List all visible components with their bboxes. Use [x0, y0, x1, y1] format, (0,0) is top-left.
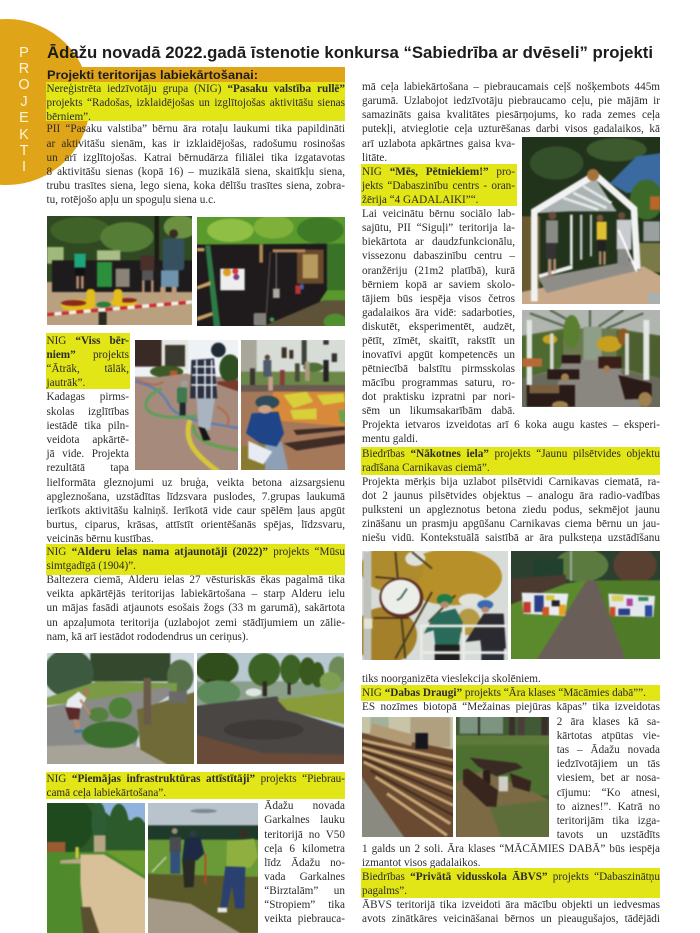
photo: three people mowing along road — [148, 803, 258, 933]
text block: right column top — [362, 81, 660, 135]
section heading: Projekti teritorijas labiekārtošanai: — [47, 68, 258, 82]
text block: Mēs, Pētniekiem narrow: gadalaikos āra vidē: sadarboties, — [362, 307, 515, 319]
text block: Ādažu novada Garkalnes: teritorijā no V50 — [264, 829, 345, 841]
text block: Ādažu novada Garkalnes: “Stropiem” tika — [264, 899, 345, 911]
decorative orange circle — [0, 19, 90, 185]
side label: PROJEKTI: P — [19, 44, 29, 60]
text block: Alderu ielas: Baltezera ciemā, Alderu ielas 27 vēsturiskās ēkas pagalmā tika — [46, 574, 345, 586]
text block: Pasaku valstība: PII “Pasaku valstiba” bērnu āra rotaļu laukumi tika papildināti — [46, 123, 345, 135]
text block: Dabas Draugi wrapped text: tas – Ādažu novada — [557, 744, 660, 756]
photo: picnic table in the forest — [456, 717, 549, 837]
text block: Viss bērniem narrow — [46, 335, 129, 474]
text block: Dabas Draugi: NIG “Dabas Draugi” projekts “Āra klases “Mācāmies dabā””. — [362, 687, 646, 699]
text block: Privātā vidusskola ĀBVS: pagalms”. — [362, 885, 407, 897]
photo: gravel road with truck — [47, 803, 145, 933]
highlight: Dabas Draugi — [361, 685, 660, 701]
text block: Mēs, Pētniekiem narrow: pētīt, zīmēt, skaitīt, rakstīt un — [362, 335, 515, 347]
text block: Nākotnes iela: zināšanu un prasmju apgūšanu Carnikavas ciema bērnu un jau- — [362, 518, 660, 530]
text block: Pasaku valstība — [46, 83, 345, 206]
highlight: Mēs, Pētniekiem — [361, 164, 517, 206]
text block: Mēs, Pētniekiem narrow: bērniem kopā ar saviem skolo- — [362, 279, 515, 291]
highlight: Viss bērniem — [46, 333, 130, 389]
text block: Mēs, Pētniekiem narrow: žērija “4 GADALAIKI”“. — [362, 194, 478, 206]
text block: Ādažu novada Garkalnes: Ādažu novada — [264, 800, 345, 812]
text block: Dabas Draugi wrapped text: tavots un uzstādīts — [557, 829, 660, 841]
text block: Nākotnes iela: niešu vidū. Kontekstuālā saistībā ar āra pulksteņa uzstādīšanu — [362, 532, 660, 544]
text block: Piemājas infrastruktūras: NIG “Piemājas infrastruktūras attīstītāji” projekts “Piebrau- — [46, 773, 345, 785]
text block: Mēs, Pētniekiem narrow: mācību programmas saturu, ro- — [362, 377, 515, 389]
text block: Dabas Draugi wrapped text: kārtotas atpūtas vie- — [557, 730, 660, 742]
photo: greenhouse frame with three people — [522, 137, 660, 304]
text block: Mēs, Pētniekiem narrow: inovatīvi apgūt kompetencēs un — [362, 349, 515, 361]
text block: Ādažu novada Garkalnes: vada Garkalnes — [264, 871, 345, 883]
text block: Projekta ietvaros: Projekta ietvaros izveidotas arī 6 koka augu kastes – eksperi- — [362, 419, 660, 431]
text block: Pasaku valstība: bērniem”. — [46, 111, 91, 123]
highlight: Piemājas infrastruktūras attīstītāji — [46, 772, 345, 799]
text block: Piemājas infrastruktūras — [46, 773, 345, 799]
side label: PROJEKTI: O — [18, 77, 30, 93]
text block: right column top: samazināts gaisa kvalitātes piesārņojums, ko rada zemes ceļa — [362, 109, 660, 121]
text block: Dabas Draugi wrapped text — [556, 716, 660, 841]
text block: Alderu ielas: simtgadīgā (1904)”. — [46, 560, 136, 572]
text block: Pasaku valstība: un arī izglītojošas. Katrai bērnudārza filiālei tika izgatavotas — [46, 152, 345, 164]
text block: Pasaku valstība: Nereģistrēta iedzīvotāju grupa (NIG) “Pasaku valstība rullē” — [46, 83, 345, 95]
text block: Dabas Draugi — [362, 687, 660, 713]
text block: Viss bērniem continued: lielformāta gleznojumi uz bruģa, veikta betona aizsargsienu — [46, 477, 345, 489]
orange heading band — [46, 67, 345, 82]
text block: Dabas Draugi: ES nozīmes biotopā “Mežainas piejūras kāpas” tika izveidotas — [362, 701, 660, 713]
side label: PROJEKTI: J — [20, 94, 28, 110]
photo: child and woman on painted paving — [135, 340, 238, 470]
highlight: Pasaku valstība rullē — [46, 82, 345, 121]
text block: Dabas Draugi wrapped text: 2 āra klases kā sa- — [557, 716, 660, 728]
text block: Privātā vidusskola ĀBVS: avots zinātkāres veicināšanai bērnos un pieaugušajos, tādējādi — [362, 913, 660, 925]
text block: Privātā vidusskola ĀBVS: ĀBVS teritorijā tika izveidoti āra mācību objekti un iedvesmas — [362, 899, 660, 911]
highlight: Alderu ielas nama atjaunotāji — [46, 544, 345, 574]
text block: Alderu ielas — [46, 546, 345, 643]
text block: Dabas Draugi wrapped text: viesiem, bet ar nosa- — [557, 772, 660, 784]
text block: Viss bērniem narrow: Kadagas pirms- — [46, 391, 129, 403]
text block: Mēs, Pētniekiem narrow — [362, 138, 516, 417]
text block: Viss bērniem continued — [46, 477, 345, 545]
text block: Mēs, Pētniekiem narrow: sēm un likumsakarībām dabā. — [362, 405, 515, 417]
text block: Mēs, Pētniekiem narrow: jekts “Dabaszinību centrs - oran- — [362, 180, 515, 192]
text block: Ādažu novada Garkalnes: Garkalnes lauku — [264, 814, 345, 826]
side label: PROJEKTI: K — [19, 127, 29, 143]
text block: Mēs, Pētniekiem narrow: diskutēt, eksperimentēt, audzēt, — [362, 321, 515, 333]
text block: Alderu ielas: NIG “Alderu ielas nama atjaunotāji (2022)” projekts “Mūsu — [46, 546, 345, 558]
text block: Viss bērniem continued: ierīkots aktivitāšu kalniņš. Ierīkotā vide caur spēlēm ļaus apgūt — [46, 505, 345, 517]
text block: Mēs, Pētniekiem narrow: litāte. — [362, 152, 387, 164]
text block: Viss bērniem narrow: jā vide. Projekta — [46, 448, 129, 460]
photo: greenhouse interior — [522, 310, 660, 407]
text block: Mēs, Pētniekiem narrow: tājiem būs iespēja visos četros — [362, 293, 515, 305]
side label: PROJEKTI: T — [20, 143, 28, 159]
photo: boy on coloured paving — [241, 340, 345, 470]
text block: Āra klases: izmantot visos gadalaikos. — [362, 857, 480, 869]
text block: Mēs, Pētniekiem narrow: arī uzlabota apkārtnes gaisa kva- — [362, 138, 515, 150]
text block: Alderu ielas: un mājas fasādi atjaunots esošais žogs (33 m garumā), sakārtota — [46, 602, 345, 614]
text block: Pasaku valstība: trubu trasītes siena, lego siena, koka dēlīšu trasītes siena, zobra- — [46, 180, 345, 192]
text block: Viss bērniem continued: burtus, ciparus, krāsas, attīstīt orientēšanās spējas, līdzsvaru, — [46, 519, 345, 531]
text block: Viss bērniem continued: veicinās bērnu kustības. — [46, 533, 154, 545]
title: Ādažu novadā 2022.gadā īstenotie konkursa “Sabiedrība ar dvēseli” projekti — [47, 43, 653, 62]
text block: Pasaku valstība: ar aktivitāšu sienām, kas ir izklaidējošas, radošumu rosinošas — [46, 138, 345, 150]
text block: Nākotnes iela: dot 2 jaunus pilsētvides objektus – analogu āra radio-vadības — [362, 490, 660, 502]
text block: Viss bērniem narrow: niem” projekts — [46, 349, 129, 361]
photo: painted flower pots beside path — [511, 551, 660, 659]
text block: Āra klases: 1 galds un 2 soli. Āra klases “MĀCĀMIES DABĀ” būs iespēja — [362, 843, 660, 855]
text block: Mēs, Pētniekiem narrow: pētniecībā balstītu pirmsskolas — [362, 363, 515, 375]
highlight: Privātā vidusskola ĀBVS — [361, 868, 660, 898]
side label: PROJEKTI: I — [22, 159, 26, 175]
text block: Pasaku valstība: 8 aktivitāšu sienas (kopā 16) – muzikālā siena, skaitīkļu siena, — [46, 166, 345, 178]
text block: Pasaku valstība: projekts “Radošas, izklaidējošas un izglītojošas aktivitāšu sienas — [46, 97, 345, 109]
photo: activity wall with hanging objects — [197, 217, 345, 326]
text block: Projekta ietvaros — [362, 419, 660, 445]
text block: Nākotnes iela: Biedrības “Nākotnes iela” projekts “Jaunu pilsētvides objektu — [362, 448, 660, 460]
text block: Nākotnes iela — [362, 448, 660, 544]
text block: Ādažu novada Garkalnes: līdz Ādažu no- — [264, 857, 345, 869]
text block: right column top: garumā. Uzlabojot iedzīvotāju piebraucamo ceļu, pie mājām ir — [362, 95, 660, 107]
text block: Nākotnes iela: pulksteni un apgleznotus betona ziedu podus, sekmējot jaunu — [362, 504, 660, 516]
side label: PROJEKTI: R — [19, 61, 29, 77]
text block: Mēs, Pētniekiem narrow: sajūtu, PII “Siguļi” teritorija la- — [362, 222, 515, 234]
text block: Nākotnes iela: radīšana Carnikavas ciemā”. — [362, 462, 490, 474]
text block: Dabas Draugi wrapped text: teritorijām tika izga- — [557, 815, 660, 827]
text block: Mēs, Pētniekiem narrow: NIG “Mēs, Pētniekiem!” pro- — [362, 166, 515, 178]
photo: outdoor clock with two men on lift — [362, 551, 508, 660]
text block: Mēs, Pētniekiem narrow: dot praktisku izpratni par nori- — [362, 391, 515, 403]
text block: Viss bērniem narrow: “Ātrāk, tālāk, — [46, 363, 129, 375]
side label: PROJEKTI — [18, 44, 30, 175]
text block: Mēs, Pētniekiem narrow: Lai veicinātu bērnu sociālo lab- — [362, 208, 515, 220]
text block: Alderu ielas: nam, kā arī iestādot rododendrus un ceriņus). — [46, 631, 248, 643]
text block: Viss bērniem narrow: jautrāk”. — [46, 377, 85, 389]
text block: Ādažu novada Garkalnes: veikta piebrauca- — [264, 913, 345, 925]
photo: stacked bark-edged boards — [362, 717, 453, 837]
text block: Ādažu novada Garkalnes: ceļa 6 kilometra — [264, 843, 345, 855]
text block: Āra klases — [362, 843, 660, 869]
text block: Viss bērniem narrow: NIG “Viss bēr- — [46, 335, 129, 347]
photo: playground activity wall being installed — [47, 216, 192, 325]
text block: Mēs, Pētniekiem narrow: biekārtota ar daudzfunkcionālu, — [362, 236, 515, 248]
text block: Privātā vidusskola ĀBVS: Biedrības “Privātā vidusskola ĀBVS” projekts “Dabaszinātņu — [362, 871, 660, 883]
side label: PROJEKTI: E — [19, 110, 29, 126]
text block: Alderu ielas: un apzaļumota teritorija (uzlabojot zemi stādījumiem un zālie- — [46, 617, 345, 629]
text block: Nākotnes iela: Projekta mērķis bija uzlabot pilsētvidi Carnikavas ciematā, ra- — [362, 476, 660, 488]
highlight: Nākotnes iela — [361, 447, 660, 475]
text block: Viss bērniem continued: apgleznošana, uzstādītas līdzsvara puslodes, 7.grupas laukumā — [46, 491, 345, 503]
photo: cleared ground with trees — [197, 653, 344, 764]
text block: Piemājas infrastruktūras: camā ceļa labiekārtošana”. — [46, 787, 166, 799]
text block: Projekta ietvaros: mentu galdi. — [362, 433, 418, 445]
text block: Ādažu novada Garkalnes: “Birztalām” un — [264, 885, 345, 897]
text block: Ādažu novada Garkalnes — [264, 800, 345, 925]
text block: Pasaku valstība: tu, rotējošo apļu un spoguļu siena u.c. — [46, 194, 216, 206]
text block: Dabas Draugi wrapped text: to aiznes!”. Katrā no — [557, 801, 660, 813]
text block: Viss bērniem narrow: skolas izglītības — [46, 406, 129, 418]
text block: Mēs, Pētniekiem narrow: oranžēriju (21m2 platībā), kurā — [362, 265, 515, 277]
text block: right column top: putekļi, atvieglotie ceļa uzturēšanas darbi visos gadalaikos, kā — [362, 123, 660, 135]
text block: Viss bērniem narrow: iestādē tika piln- — [46, 420, 129, 432]
photo: man clearing bushes by road — [47, 653, 194, 764]
text block: Privātā vidusskola ĀBVS — [362, 871, 660, 925]
text line: vieslekcija: tiks noorganizēta vieslekcija skolēniem. — [362, 673, 541, 685]
text block: Dabas Draugi wrapped text: iedzīvotājiem un tās — [557, 758, 660, 770]
text block: Alderu ielas: veikta apkārtējās teritorijas labiekārtošana – starp Alderu ielu — [46, 588, 345, 600]
text block: Mēs, Pētniekiem narrow: vissezonu dabaszinību centru – — [362, 250, 515, 262]
text block: Viss bērniem narrow: rezultātā tapa — [46, 462, 129, 474]
text block: Dabas Draugi wrapped text: cījumu: “Ko atnesi, — [557, 787, 660, 799]
text block: right column top: mā ceļa labiekārtošana – piebraucamais ceļš nošķembots 445m — [362, 81, 660, 93]
text block: Viss bērniem narrow: veidota apkārtē- — [46, 434, 129, 446]
